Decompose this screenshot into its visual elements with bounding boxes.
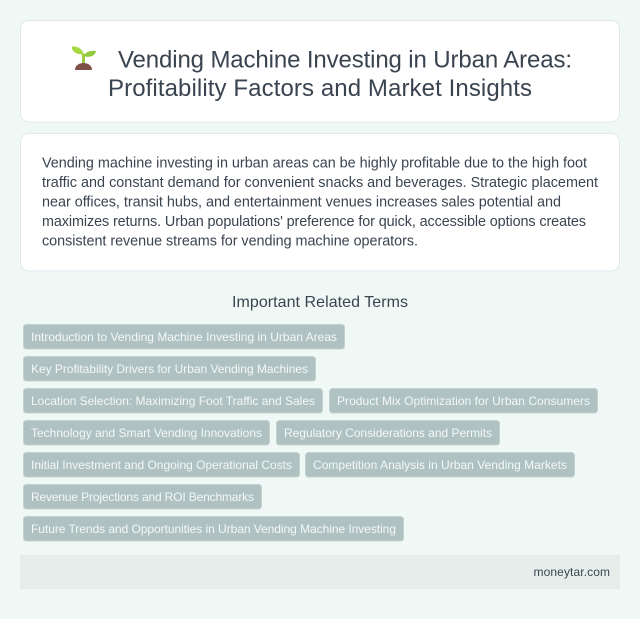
text block: description: consistent revenue streams for vending machine operators. xyxy=(42,234,418,250)
tag: introduction xyxy=(24,324,344,349)
panel: term tags xyxy=(24,324,598,541)
tag: product mix: Product Mix Optimization for Urban Consumers xyxy=(337,394,590,408)
text block: description: Vending machine investing in urban areas can be highly profitable due to the high foot xyxy=(42,156,587,172)
heading: related terms: Important Related Terms xyxy=(232,294,408,311)
panel: title card xyxy=(20,20,620,122)
tag: future trends: Future Trends and Opportunities in Urban Vending Machine Investing xyxy=(31,522,396,536)
text block: description: maximizes returns. Urban populations' preference for quick, accessible options creates xyxy=(42,214,586,230)
icon: seedling xyxy=(72,46,96,70)
title xyxy=(108,46,572,102)
tag: location selection xyxy=(24,388,322,413)
tag: introduction: Introduction to Vending Machine Investing in Urban Areas xyxy=(31,330,337,344)
text block: description xyxy=(42,156,598,250)
tag: initial investment xyxy=(24,452,300,477)
tag: profitability drivers xyxy=(24,356,316,381)
tag: technology: Technology and Smart Vending Innovations xyxy=(31,426,262,440)
tag: future trends xyxy=(24,516,404,541)
text block: description: traffic and constant demand for convenient snacks and beverages. Strategic placement xyxy=(42,175,598,191)
tag: profitability drivers: Key Profitability Drivers for Urban Vending Machines xyxy=(31,362,308,376)
tag: revenue projections: Revenue Projections and ROI Benchmarks xyxy=(31,490,254,504)
title: Profitability Factors and Market Insights xyxy=(108,75,532,102)
title: Vending Machine Investing in Urban Areas: xyxy=(118,46,572,74)
tag: product mix xyxy=(330,388,598,413)
tag: revenue projections xyxy=(24,484,262,509)
footer: moneytar.com xyxy=(534,565,610,579)
tag: technology xyxy=(24,420,270,445)
panel: description xyxy=(20,134,620,271)
text block: description: near offices, transit hubs, and entertainment venues increases sales potential and xyxy=(42,194,561,210)
tag: competition analysis: Competition Analysis in Urban Vending Markets xyxy=(313,458,567,472)
tag: initial investment: Initial Investment and Ongoing Operational Costs xyxy=(31,458,292,472)
tag: regulatory xyxy=(276,420,500,445)
footer xyxy=(20,555,620,589)
tag: competition analysis xyxy=(306,452,574,477)
tag: regulatory: Regulatory Considerations and Permits xyxy=(284,426,492,440)
tag: location selection: Location Selection: Maximizing Foot Traffic and Sales xyxy=(31,394,315,408)
